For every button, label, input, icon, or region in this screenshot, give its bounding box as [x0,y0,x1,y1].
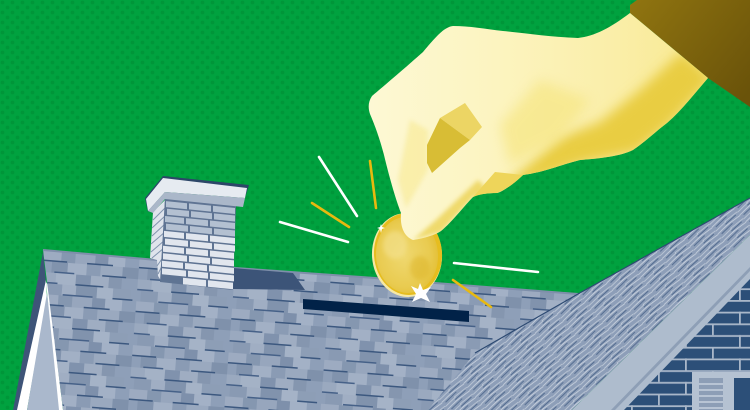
roof slot [303,299,469,322]
star: large [411,283,431,302]
star: small [377,224,385,233]
vent louvers [699,378,723,410]
chimney shadow on roof [233,268,305,290]
hand shading: underside [490,52,712,198]
hand: upper fold above finger gap [440,103,482,140]
hand: lower palm fold [473,172,523,197]
yellow line 3 [453,280,491,307]
chimney side face [150,200,165,282]
gable: left wall [13,252,63,410]
hand shading: index finger [398,120,428,208]
vent frame [692,372,750,410]
sleeve [630,0,750,107]
white line 1 [319,157,357,216]
hand shading: palm mid-tone [500,80,590,165]
hand shading: thumb underside [413,180,490,240]
right roof with ridged shingles [428,198,750,410]
hand: shadow between fingers [427,118,470,173]
hand [369,13,712,240]
brick wall with vent [618,268,750,410]
chimney [145,176,249,290]
white line 2 [280,222,348,242]
chimney front bricks [160,198,236,290]
coin [369,211,445,299]
main roof shingles [43,250,578,410]
window [734,378,750,410]
burst lines [280,157,538,307]
chimney cap [145,176,249,213]
fascia board [572,235,750,410]
yellow line 2 [312,203,349,227]
white line 3 [454,263,538,272]
yellow line 1 [370,161,376,208]
